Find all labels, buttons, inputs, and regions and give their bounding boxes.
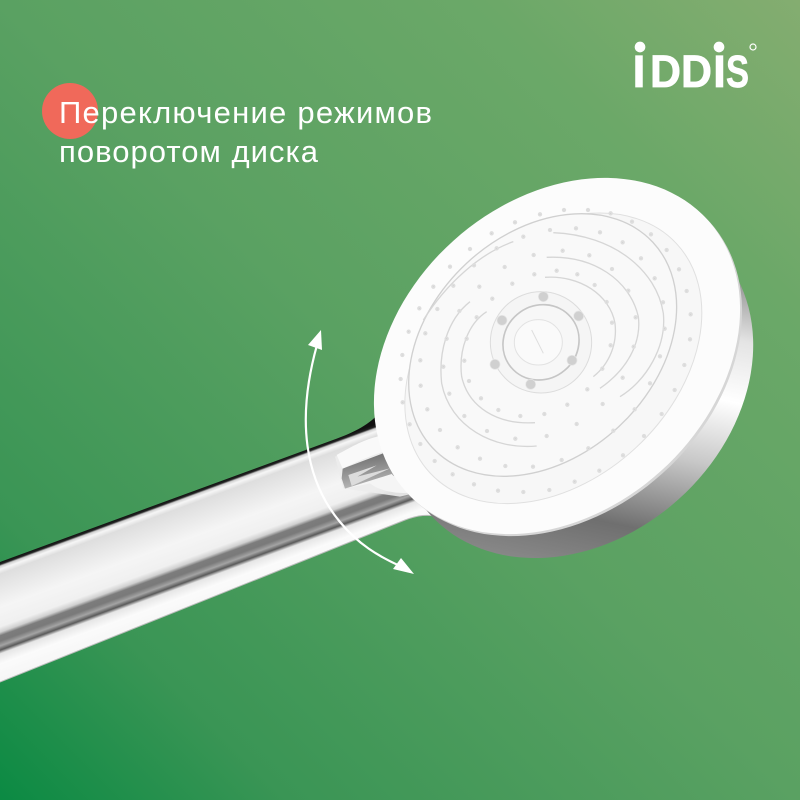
rotation arrow — [306, 330, 414, 574]
logo: iddis: S — [726, 46, 749, 97]
sprayer face details — [347, 155, 759, 562]
shower head chrome body — [326, 138, 800, 630]
shower handle — [0, 414, 440, 682]
shower head white face — [302, 105, 800, 609]
logo: iddis: I — [632, 46, 646, 97]
heading: Переключение режимов — [59, 95, 432, 130]
logo: iddis: DD — [650, 46, 712, 97]
accent circle — [42, 83, 98, 139]
center hub — [488, 289, 594, 395]
logo: iddis: I — [713, 46, 726, 97]
heading: поворотом диска — [59, 134, 319, 169]
concentric grooves — [423, 233, 664, 446]
logo: iddis — [632, 42, 756, 97]
handle clip recess — [335, 435, 413, 497]
spray nozzles — [400, 209, 692, 493]
heading — [59, 95, 432, 169]
